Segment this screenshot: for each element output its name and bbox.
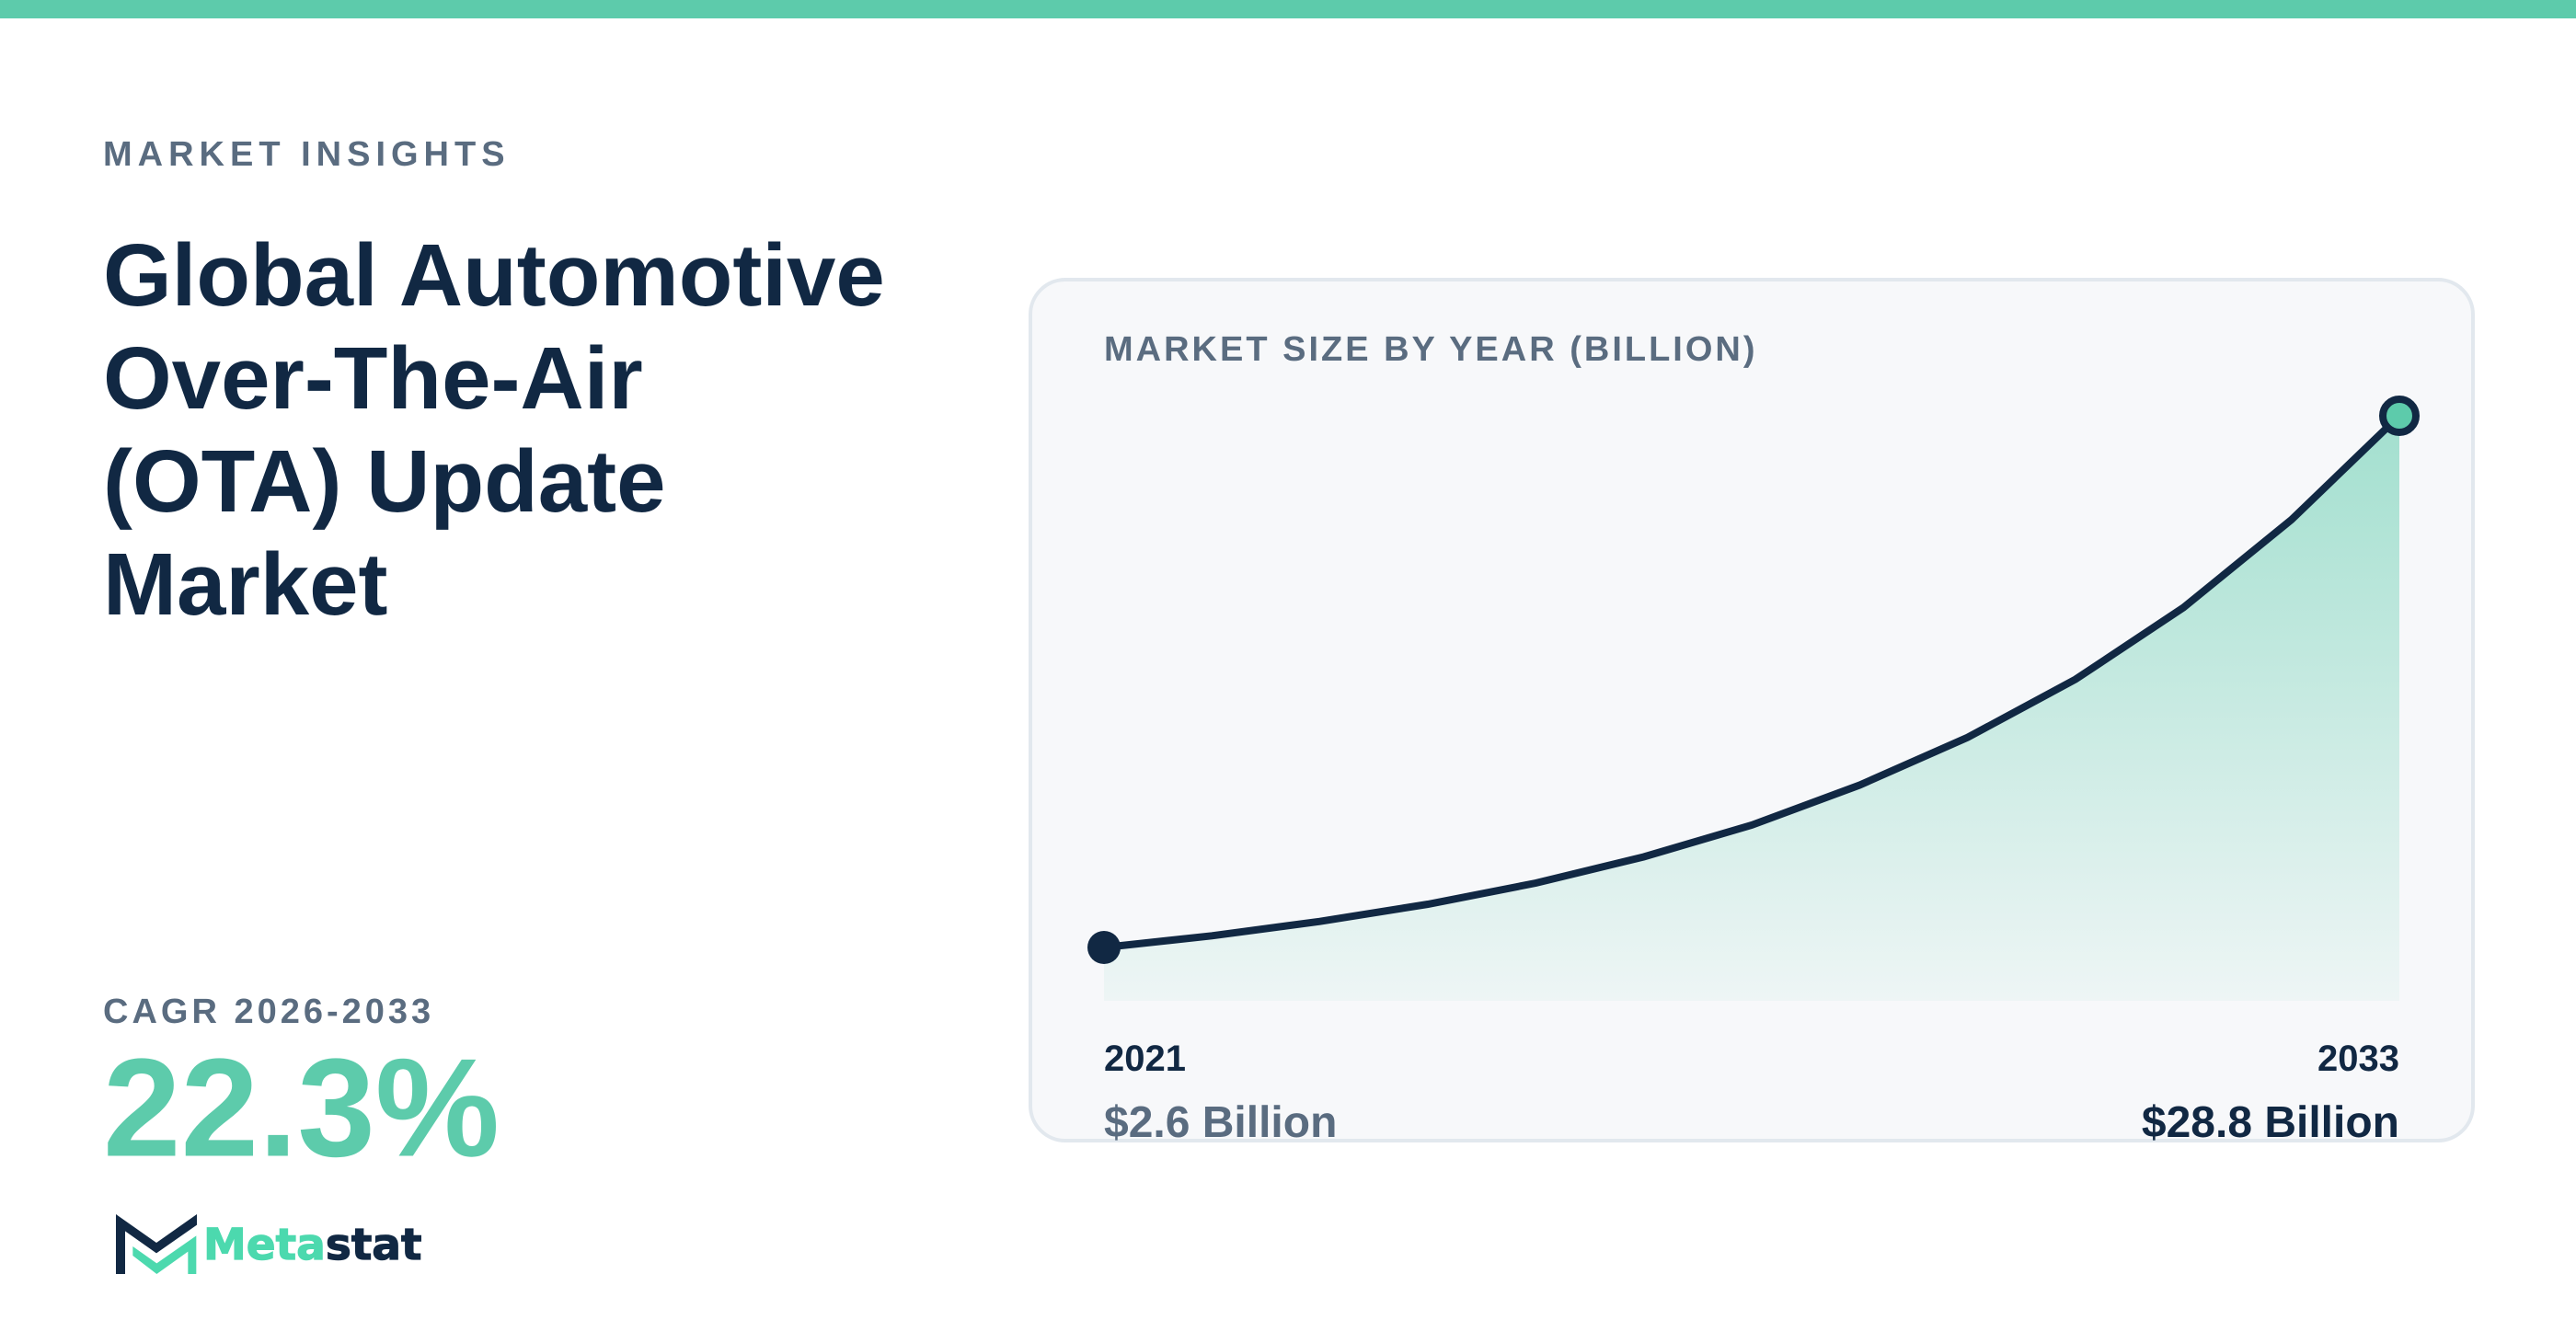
end value: $28.8 Billion [2142, 1098, 2399, 1147]
CAGR label: CAGR 2026-2033 [103, 993, 434, 1031]
title: Over-The-Air [103, 329, 643, 428]
trend line [1104, 416, 2399, 947]
title: (OTA) Update [103, 432, 665, 531]
end year: 2033 [2317, 1039, 2399, 1079]
start year: 2021 [1104, 1039, 1186, 1079]
top accent bar [0, 0, 2576, 18]
start point marker [1087, 931, 1121, 964]
end point marker [2383, 399, 2416, 432]
panel: market size chart [1030, 280, 2473, 1147]
chart heading: MARKET SIZE BY YEAR (BILLION) [1104, 330, 1758, 369]
title: Market [103, 535, 387, 634]
logo wordmark: Metastat [203, 1220, 421, 1270]
logo mark [116, 1214, 197, 1274]
area fill [1104, 416, 2399, 1001]
title [103, 226, 885, 634]
CAGR block [103, 993, 500, 1187]
eyebrow label: MARKET INSIGHTS [103, 135, 511, 174]
panel background [1030, 280, 2473, 1141]
start value: $2.6 Billion [1104, 1098, 1337, 1147]
logo: Metastat [116, 1214, 421, 1274]
CAGR value: 22.3% [103, 1030, 500, 1187]
title: Global Automotive [103, 226, 885, 325]
